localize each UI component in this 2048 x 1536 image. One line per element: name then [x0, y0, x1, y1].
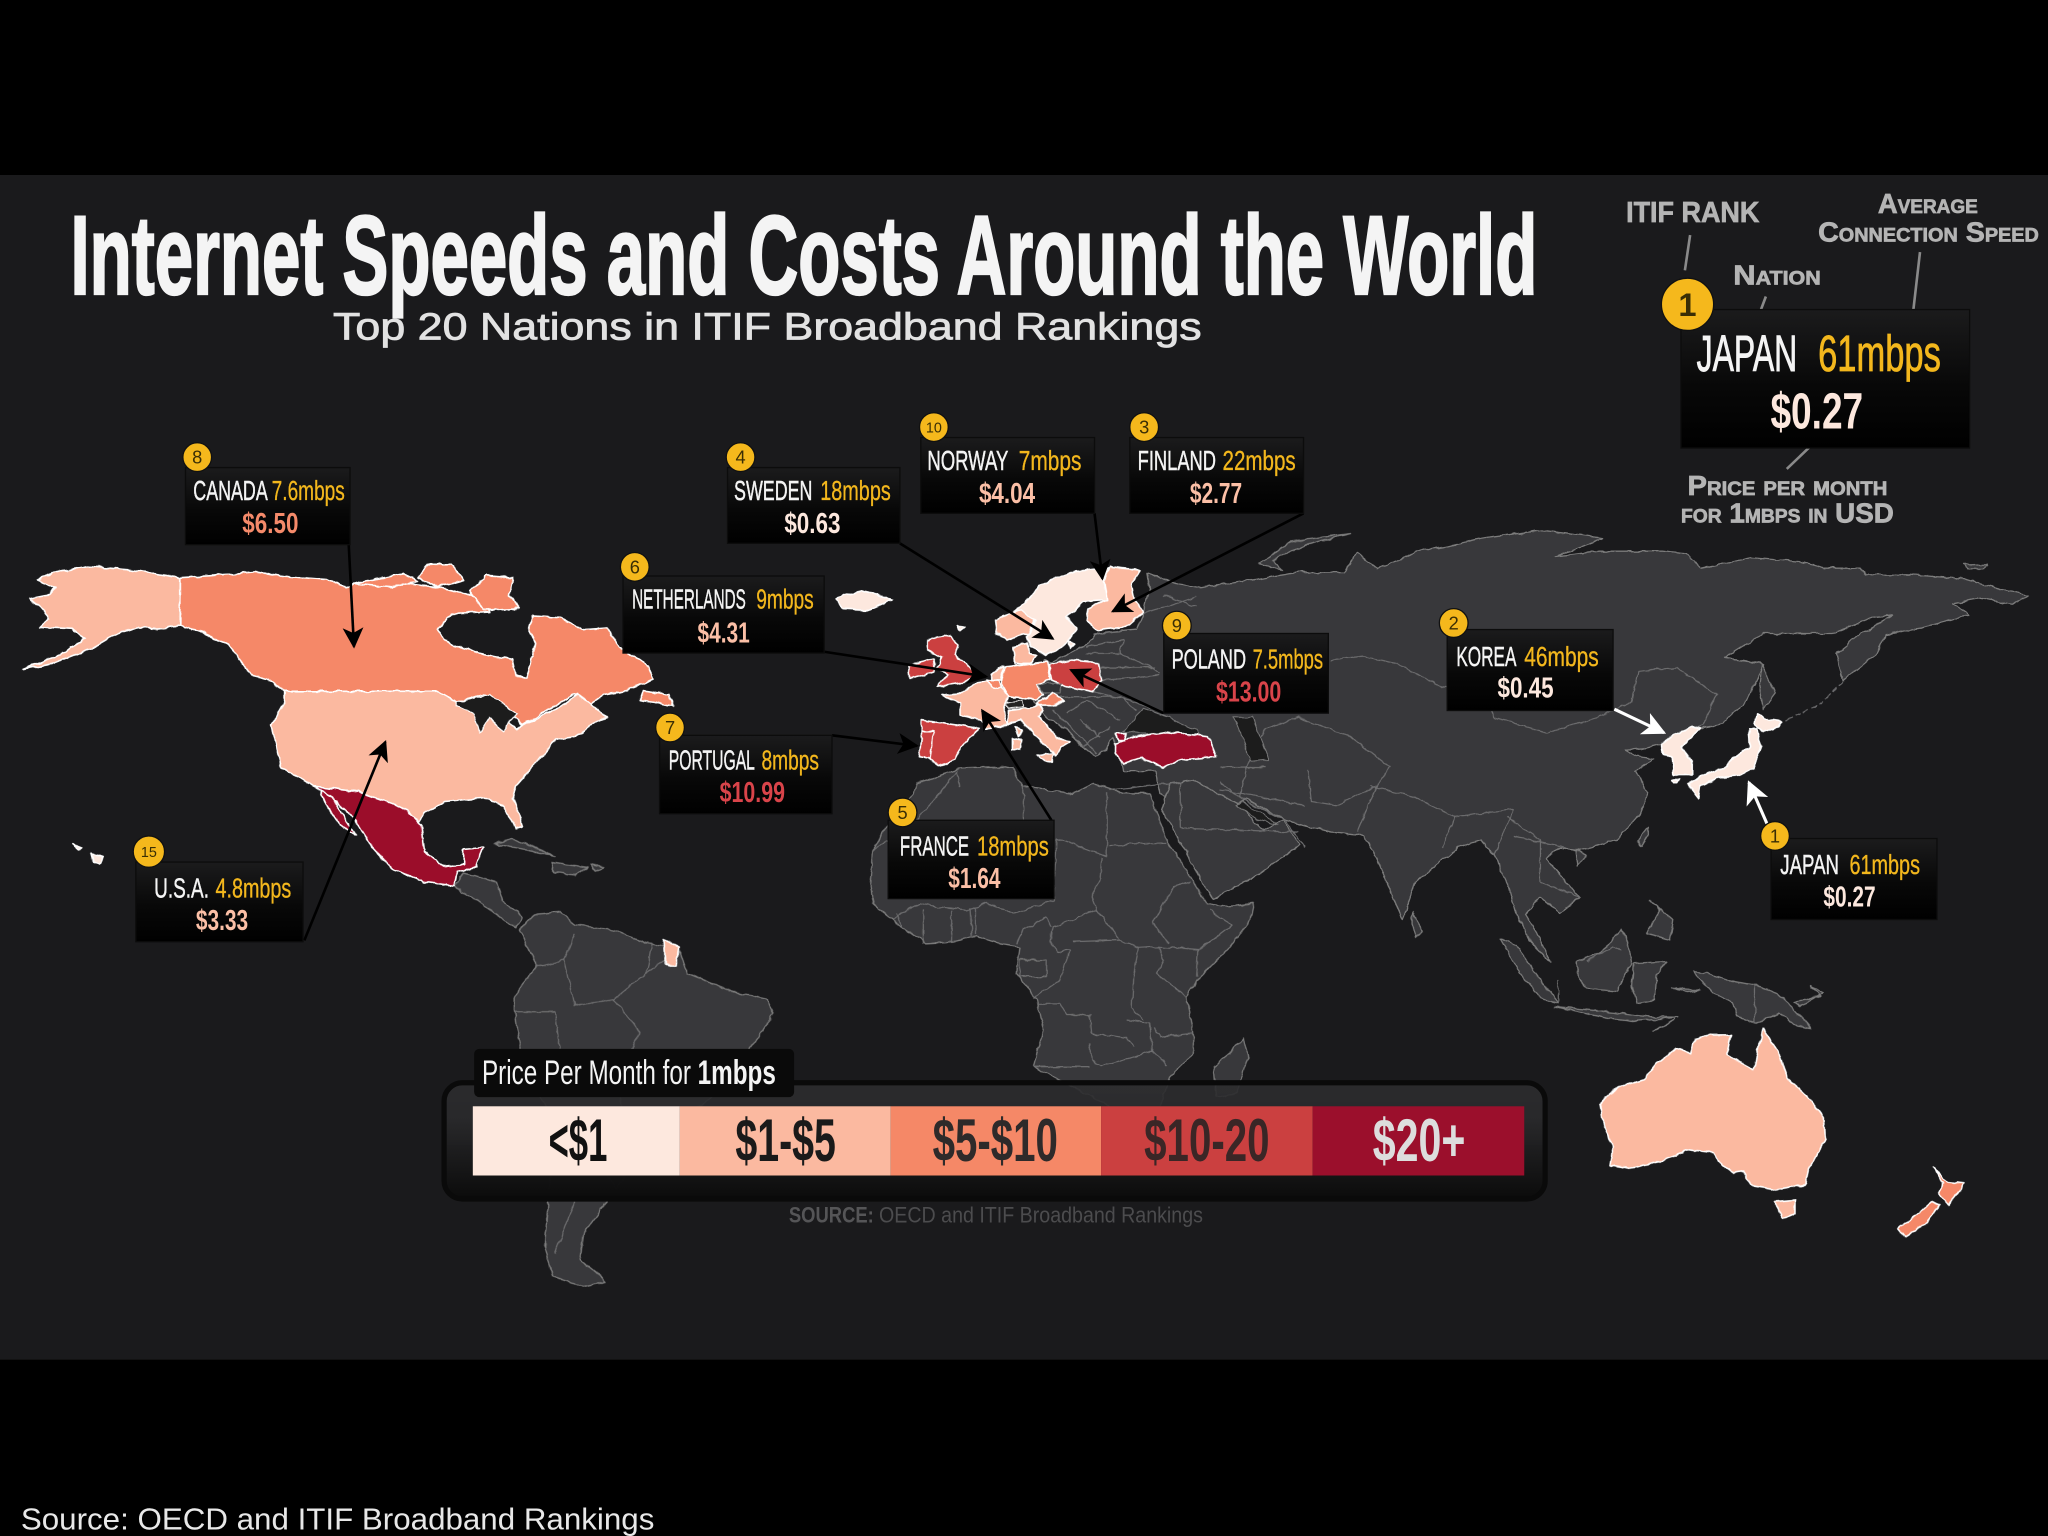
callout: Japan: $0.27: [1823, 881, 1876, 913]
arrow: USA: [304, 742, 385, 940]
map: Arabian peninsula: [1162, 780, 1300, 898]
key badge: 1: [1678, 286, 1697, 323]
callout: Finland: FINLAND: [1138, 445, 1216, 476]
callout: Finland: 22mbps: [1223, 445, 1296, 476]
callout: Poland: [1162, 611, 1328, 713]
legend swatch: $1-$5: $1-$5: [735, 1107, 836, 1174]
arrow: Sweden: [900, 543, 1053, 639]
callout: Portugal: 8mbps: [761, 744, 819, 775]
callout: Korea: 46mbps: [1524, 641, 1599, 672]
arrow: France: [982, 711, 1051, 820]
legend swatch: $20+: [1313, 1106, 1524, 1176]
arrow: Canada: [349, 545, 354, 647]
callout: Korea: 2: [1449, 613, 1459, 634]
callout: Finland: [1130, 413, 1304, 513]
callout: France: 5: [897, 802, 908, 823]
key label: price per month: Price per month: [1688, 470, 1887, 501]
callout: France: [888, 798, 1054, 899]
callout: Korea: [1439, 609, 1613, 711]
callout: U.S.A.: U.S.A.: [154, 872, 209, 903]
callout: U.S.A.: $3.33: [196, 905, 248, 937]
country: Canada: [180, 564, 673, 725]
key label: price per month: [1681, 470, 1894, 528]
key speed: 61mbps: [1818, 325, 1941, 382]
world map: [23, 530, 2028, 1287]
arrow: Japan: [1749, 782, 1767, 824]
legend tab: [474, 1049, 794, 1097]
map: Africa: [870, 767, 1253, 1122]
callout: Canada: 8: [192, 447, 202, 468]
callout: Finland: 3: [1139, 417, 1149, 438]
key label: price per month: for 1mbps in USD: [1681, 497, 1894, 528]
callout: Portugal: 7: [665, 717, 675, 738]
callout: Sweden: SWEDEN: [734, 475, 812, 506]
callout: Korea: KOREA: [1456, 641, 1517, 672]
legend: price per month for 1mbps: [444, 1049, 1545, 1199]
country: New Zealand: [1898, 1167, 1965, 1237]
arrow: Finland: [1113, 513, 1304, 611]
callout: Sweden: [726, 443, 900, 543]
callout: Netherlands: NETHERLANDS: [632, 584, 746, 615]
countries: Europe: [908, 567, 1217, 767]
callout: Sweden: $0.63: [784, 508, 840, 540]
legend heading: Price Per Month for 1mbps: [482, 1054, 776, 1092]
callout: U.S.A.: [133, 836, 303, 942]
key: how to read a callout: [1626, 188, 2039, 528]
map: Southeast Asian islands: [1500, 900, 1823, 1032]
callout: Japan: 1: [1770, 825, 1780, 846]
key badge: [1661, 278, 1714, 330]
map: Europe grey borders and Black Sea: [1053, 595, 1200, 753]
country: USA and Alaska: [23, 566, 607, 863]
callout: Canada: 7.6mbps: [272, 475, 345, 506]
map: Novaya Zemlya, Wrangel, Sri Lanka, Hainan: [1259, 534, 1987, 937]
callout: Poland: 9: [1172, 615, 1182, 636]
callout: U.S.A.: 4.8mbps: [216, 872, 291, 903]
callout: Netherlands: [620, 552, 824, 653]
callout: U.S.A.: 15: [141, 845, 157, 861]
key label: average connection speed: [1818, 188, 2039, 248]
callout: Finland: $2.77: [1190, 478, 1242, 510]
callout: Portugal: PORTUGAL: [669, 744, 755, 775]
map: Central America: [455, 839, 603, 927]
arrow: Portugal: [832, 735, 917, 746]
callout: Japan: [1761, 822, 1937, 920]
callout: Norway: 7mbps: [1019, 445, 1081, 476]
arrow: Norway: [1095, 513, 1102, 579]
legend swatch: under $1: <$1: [549, 1107, 607, 1174]
source note on panel: SOURCE:: [789, 1203, 874, 1228]
callout: Norway: [920, 413, 1095, 513]
source note on panel: OECD and ITIF Broadband Rankings: [879, 1203, 1203, 1228]
subtitle: Top 20 Nations in ITIF Broadband Rankings: [333, 307, 1202, 349]
key label: nation: Nation: [1733, 260, 1821, 291]
callout: Netherlands: $4.31: [697, 618, 750, 650]
map: Asia internal borders and seas: [1063, 534, 1987, 937]
country: French Guiana: [664, 939, 679, 967]
arrow: Netherlands: [824, 652, 986, 677]
callout: Canada: CANADA: [193, 475, 268, 506]
callout: France: FRANCE: [900, 831, 969, 862]
country: Iceland: [836, 590, 892, 610]
arrow: Poland: [1071, 670, 1164, 713]
callout: Poland: POLAND: [1172, 644, 1246, 675]
key leader lines: [1685, 235, 1920, 469]
country: Mexico: [313, 786, 483, 886]
key price: $0.27: [1770, 382, 1863, 439]
legend swatch: $5-$10: $5-$10: [933, 1107, 1058, 1174]
callout: Poland: $13.00: [1216, 676, 1281, 708]
callout: Sweden: 18mbps: [820, 475, 891, 506]
map: Eurasia landmass: [1032, 530, 2028, 963]
key label: average connection speed: Connection Speed: [1818, 217, 2039, 248]
callout: Canada: [183, 443, 350, 545]
countries: Korea and Japan: [1662, 713, 1782, 798]
callout: Netherlands: 6: [630, 556, 640, 577]
callout: France: 18mbps: [977, 831, 1049, 862]
callout: Poland: 7.5mbps: [1253, 644, 1323, 675]
map: South America: [515, 912, 773, 1287]
callout: Norway: $4.04: [979, 478, 1035, 510]
callout: Sweden: 4: [735, 447, 746, 468]
legend swatch: under $1: [473, 1106, 680, 1176]
legend frame: [444, 1083, 1545, 1199]
main dark panel: [0, 175, 2048, 1360]
key box: [1681, 310, 1970, 448]
callout: Canada: $6.50: [242, 508, 298, 540]
map: Taiwan: [1638, 827, 1648, 846]
key label: average connection speed: Average: [1878, 188, 1978, 219]
key nation: JAPAN: [1697, 325, 1797, 382]
callout: Portugal: $10.99: [720, 777, 785, 809]
callout: Portugal: [656, 713, 832, 814]
legend swatch: $10-20: $10-20: [1144, 1107, 1270, 1174]
callout: Korea: $0.45: [1497, 672, 1554, 704]
callout: Netherlands: 9mbps: [756, 584, 814, 615]
callout: Japan: 61mbps: [1849, 849, 1920, 880]
key label: ITIF rank: ITIF RANK: [1626, 197, 1760, 229]
arrow: Korea: [1614, 709, 1664, 733]
callout: Japan: JAPAN: [1780, 849, 1839, 880]
callout: Norway: NORWAY: [927, 445, 1008, 476]
map: Sakhalin and Kuril islands: [1759, 664, 1843, 721]
callout: France: $1.64: [948, 863, 1001, 895]
callout: Norway: 10: [926, 420, 942, 436]
slide caption: Source: OECD and ITIF Broadband Rankings: [21, 1501, 654, 1536]
country: Australia: [1600, 1028, 1825, 1218]
legend swatch: $20+: $20+: [1373, 1107, 1465, 1174]
